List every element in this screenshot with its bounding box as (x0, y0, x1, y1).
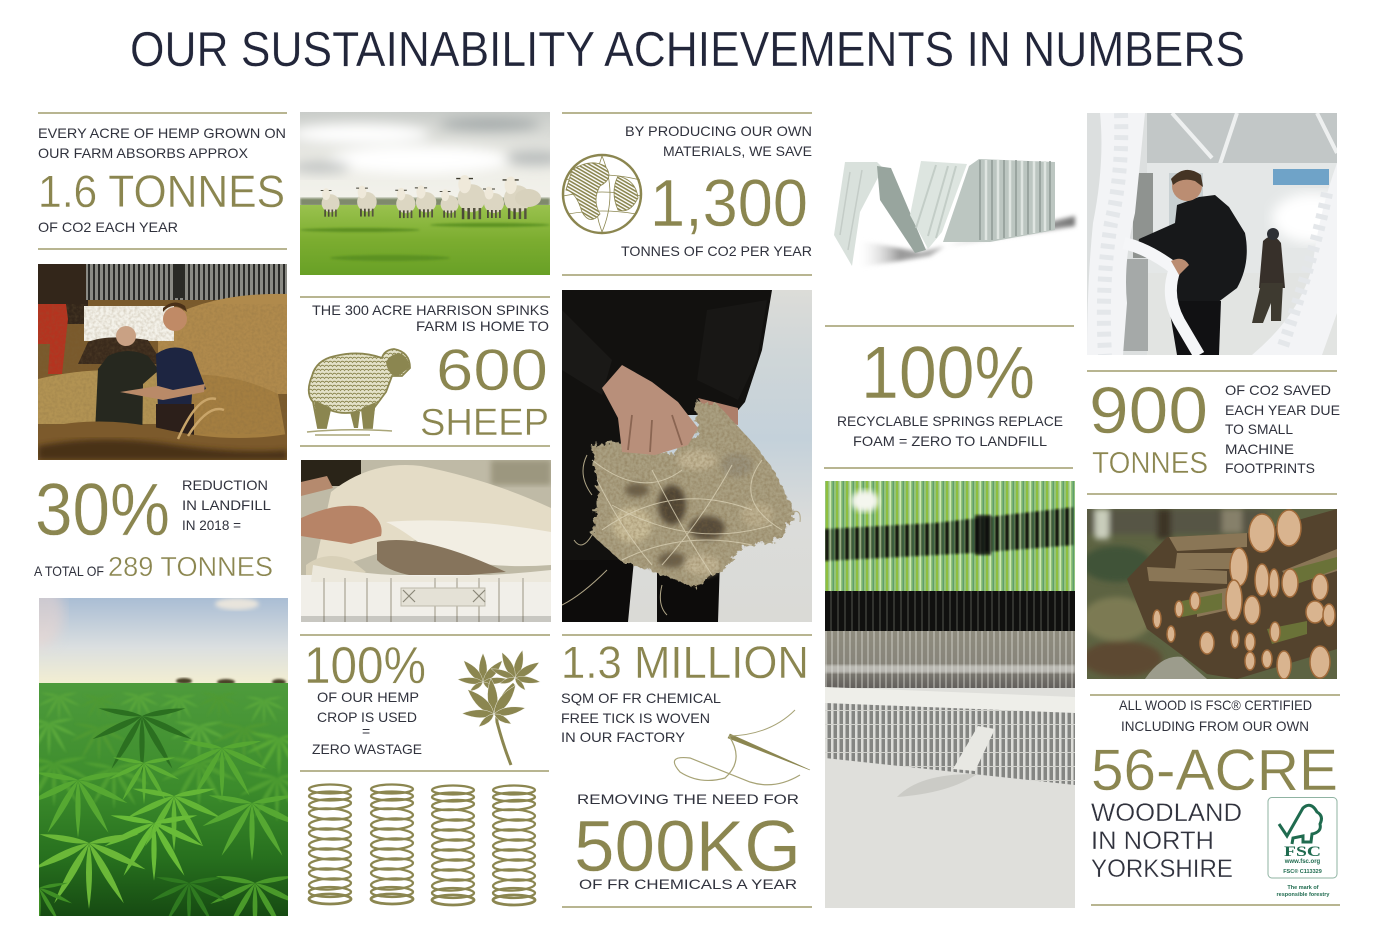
photo: stacked logs in woodland (1087, 509, 1337, 679)
panel: 30% reduction in landfill stat: IN LANDFILL (182, 497, 271, 513)
panel: hemp CO2 absorption stat: OF CO2 EACH YEAR (38, 219, 178, 235)
panel: 1,300 tonnes of CO2 stat: MATERIALS, WE SAVE (663, 143, 812, 159)
panel: 1.3 million and 500kg stat: SQM OF FR CHEMICAL (561, 690, 721, 706)
panel: 30% reduction in landfill stat: A TOTAL OF (34, 563, 104, 579)
icon: FSC logo: responsible forestry (1277, 892, 1330, 898)
icon: FSC logo: FSC® C113329 (1283, 868, 1322, 875)
panel: 30% reduction in landfill stat: 30% (35, 468, 170, 551)
panel: hemp CO2 absorption stat: 1.6 TONNES (38, 166, 285, 217)
illustration: folded pocket spring unit (834, 159, 1075, 268)
icon: FSC logo: www.fsc.org (1284, 859, 1321, 865)
panel: FSC certified woodland stat: 56-ACRE (1091, 738, 1338, 803)
panel: 600 sheep stat: THE 300 ACRE HARRISON SPINKS (312, 302, 549, 318)
photo: hand holding raw hemp fibre (562, 290, 812, 622)
panel: FSC certified woodland stat: YORKSHIRE (1091, 855, 1233, 883)
panel: 100% of hemp crop used stat: ZERO WASTAGE (312, 741, 422, 757)
panel: hemp CO2 absorption stat: OUR FARM ABSORBS APPROX (38, 145, 249, 161)
panel: 1.3 million and 500kg stat (561, 635, 812, 907)
panel: 1.3 million and 500kg stat: OF FR CHEMICALS A YEAR (579, 876, 797, 892)
panel: 900 tonnes of CO2 saved stat: MACHINE (1225, 441, 1294, 457)
panel: 900 tonnes of CO2 saved stat: TONNES (1092, 445, 1208, 480)
panel: 100% of hemp crop used stat (300, 635, 550, 771)
photo: two farmers with hay bales (38, 264, 287, 460)
icon: FSC logo: FSC (1284, 844, 1321, 860)
panel: FSC certified woodland stat: INCLUDING FROM OUR OWN (1121, 718, 1309, 734)
icon: FSC logo (1268, 798, 1337, 898)
panel: 600 sheep stat: FARM IS HOME TO (416, 318, 549, 334)
panel: 100% of hemp crop used stat: CROP IS USED (317, 709, 417, 725)
panel: 100% of hemp crop used stat: 100% (304, 637, 426, 695)
panel: 1.3 million and 500kg stat: IN OUR FACTORY (561, 729, 686, 745)
panel: FSC certified woodland stat: WOODLAND (1091, 799, 1242, 827)
icon: sheep (307, 349, 410, 435)
panel: 600 sheep stat (300, 297, 550, 446)
panel: 1,300 tonnes of CO2 stat: BY PRODUCING OUR OWN (625, 123, 812, 139)
panel: FSC certified woodland stat: ALL WOOD IS FSC® CERTIFIED (1119, 697, 1312, 713)
icon: hemp plant (457, 644, 547, 765)
photo: hemp field (39, 598, 288, 916)
panel: 30% reduction in landfill stat: IN 2018 = (182, 517, 241, 533)
title: OUR SUSTAINABILITY ACHIEVEMENTS IN NUMBERS (130, 23, 1245, 77)
panel: 1.3 million and 500kg stat: FREE TICK IS WOVEN (561, 710, 710, 726)
icon: row of coil springs (309, 784, 535, 905)
panel: 1.3 million and 500kg stat: REMOVING THE NEED FOR (577, 791, 799, 807)
panel: 1,300 tonnes of CO2 stat (562, 113, 812, 275)
panel: 900 tonnes of CO2 saved stat: 900 (1089, 373, 1208, 447)
panel: 100% of hemp crop used stat: OF OUR HEMP (317, 689, 419, 705)
panel: 30% reduction in landfill stat: 289 TONNES (108, 551, 273, 582)
panel: 900 tonnes of CO2 saved stat: OF CO2 SAVED (1225, 382, 1331, 398)
panel: FSC certified woodland stat: IN NORTH (1091, 827, 1214, 855)
panel: 30% reduction in landfill stat (34, 468, 273, 582)
panel: hemp CO2 absorption stat: EVERY ACRE OF HEMP GROWN ON (38, 125, 286, 141)
panel: hemp CO2 absorption stat (38, 113, 287, 249)
panel: 900 tonnes of CO2 saved stat: FOOTPRINTS (1225, 460, 1315, 476)
photo: loom weaving fabric (825, 481, 1075, 908)
panel: FSC certified woodland stat (1090, 695, 1340, 905)
panel: 30% reduction in landfill stat: REDUCTION (182, 477, 268, 493)
icon: FSC logo: The mark of (1287, 885, 1319, 891)
panel: 1.3 million and 500kg stat: 500KG (574, 807, 801, 887)
panel: 600 sheep stat: 600 (436, 338, 548, 403)
icon: needle and thread (674, 710, 810, 785)
panel: 1,300 tonnes of CO2 stat: TONNES OF CO2 PER YEAR (621, 243, 812, 259)
panel: 100% recyclable springs stat: RECYCLABLE SPRINGS REPLACE (837, 413, 1063, 429)
icon: globe (563, 155, 641, 233)
panel: 100% recyclable springs stat (824, 326, 1074, 468)
panel: 900 tonnes of CO2 saved stat (1087, 371, 1340, 494)
photo: wool layer on mattress (301, 460, 551, 622)
panel: 1.3 million and 500kg stat: 1.3 MILLION (561, 637, 809, 688)
panel: 900 tonnes of CO2 saved stat: TO SMALL (1225, 421, 1293, 437)
panel: 600 sheep stat: SHEEP (420, 402, 549, 444)
photo: sheep in field (300, 112, 550, 275)
panel: 100% of hemp crop used stat: = (362, 723, 370, 739)
photo: worker with spring pockets in factory (1087, 113, 1337, 355)
panel: 900 tonnes of CO2 saved stat: EACH YEAR DUE (1225, 402, 1340, 418)
panel: 100% recyclable springs stat: FOAM = ZERO TO LANDFILL (853, 433, 1047, 449)
panel: 100% recyclable springs stat: 100% (861, 331, 1035, 414)
panel: 1,300 tonnes of CO2 stat: 1,300 (650, 166, 808, 241)
